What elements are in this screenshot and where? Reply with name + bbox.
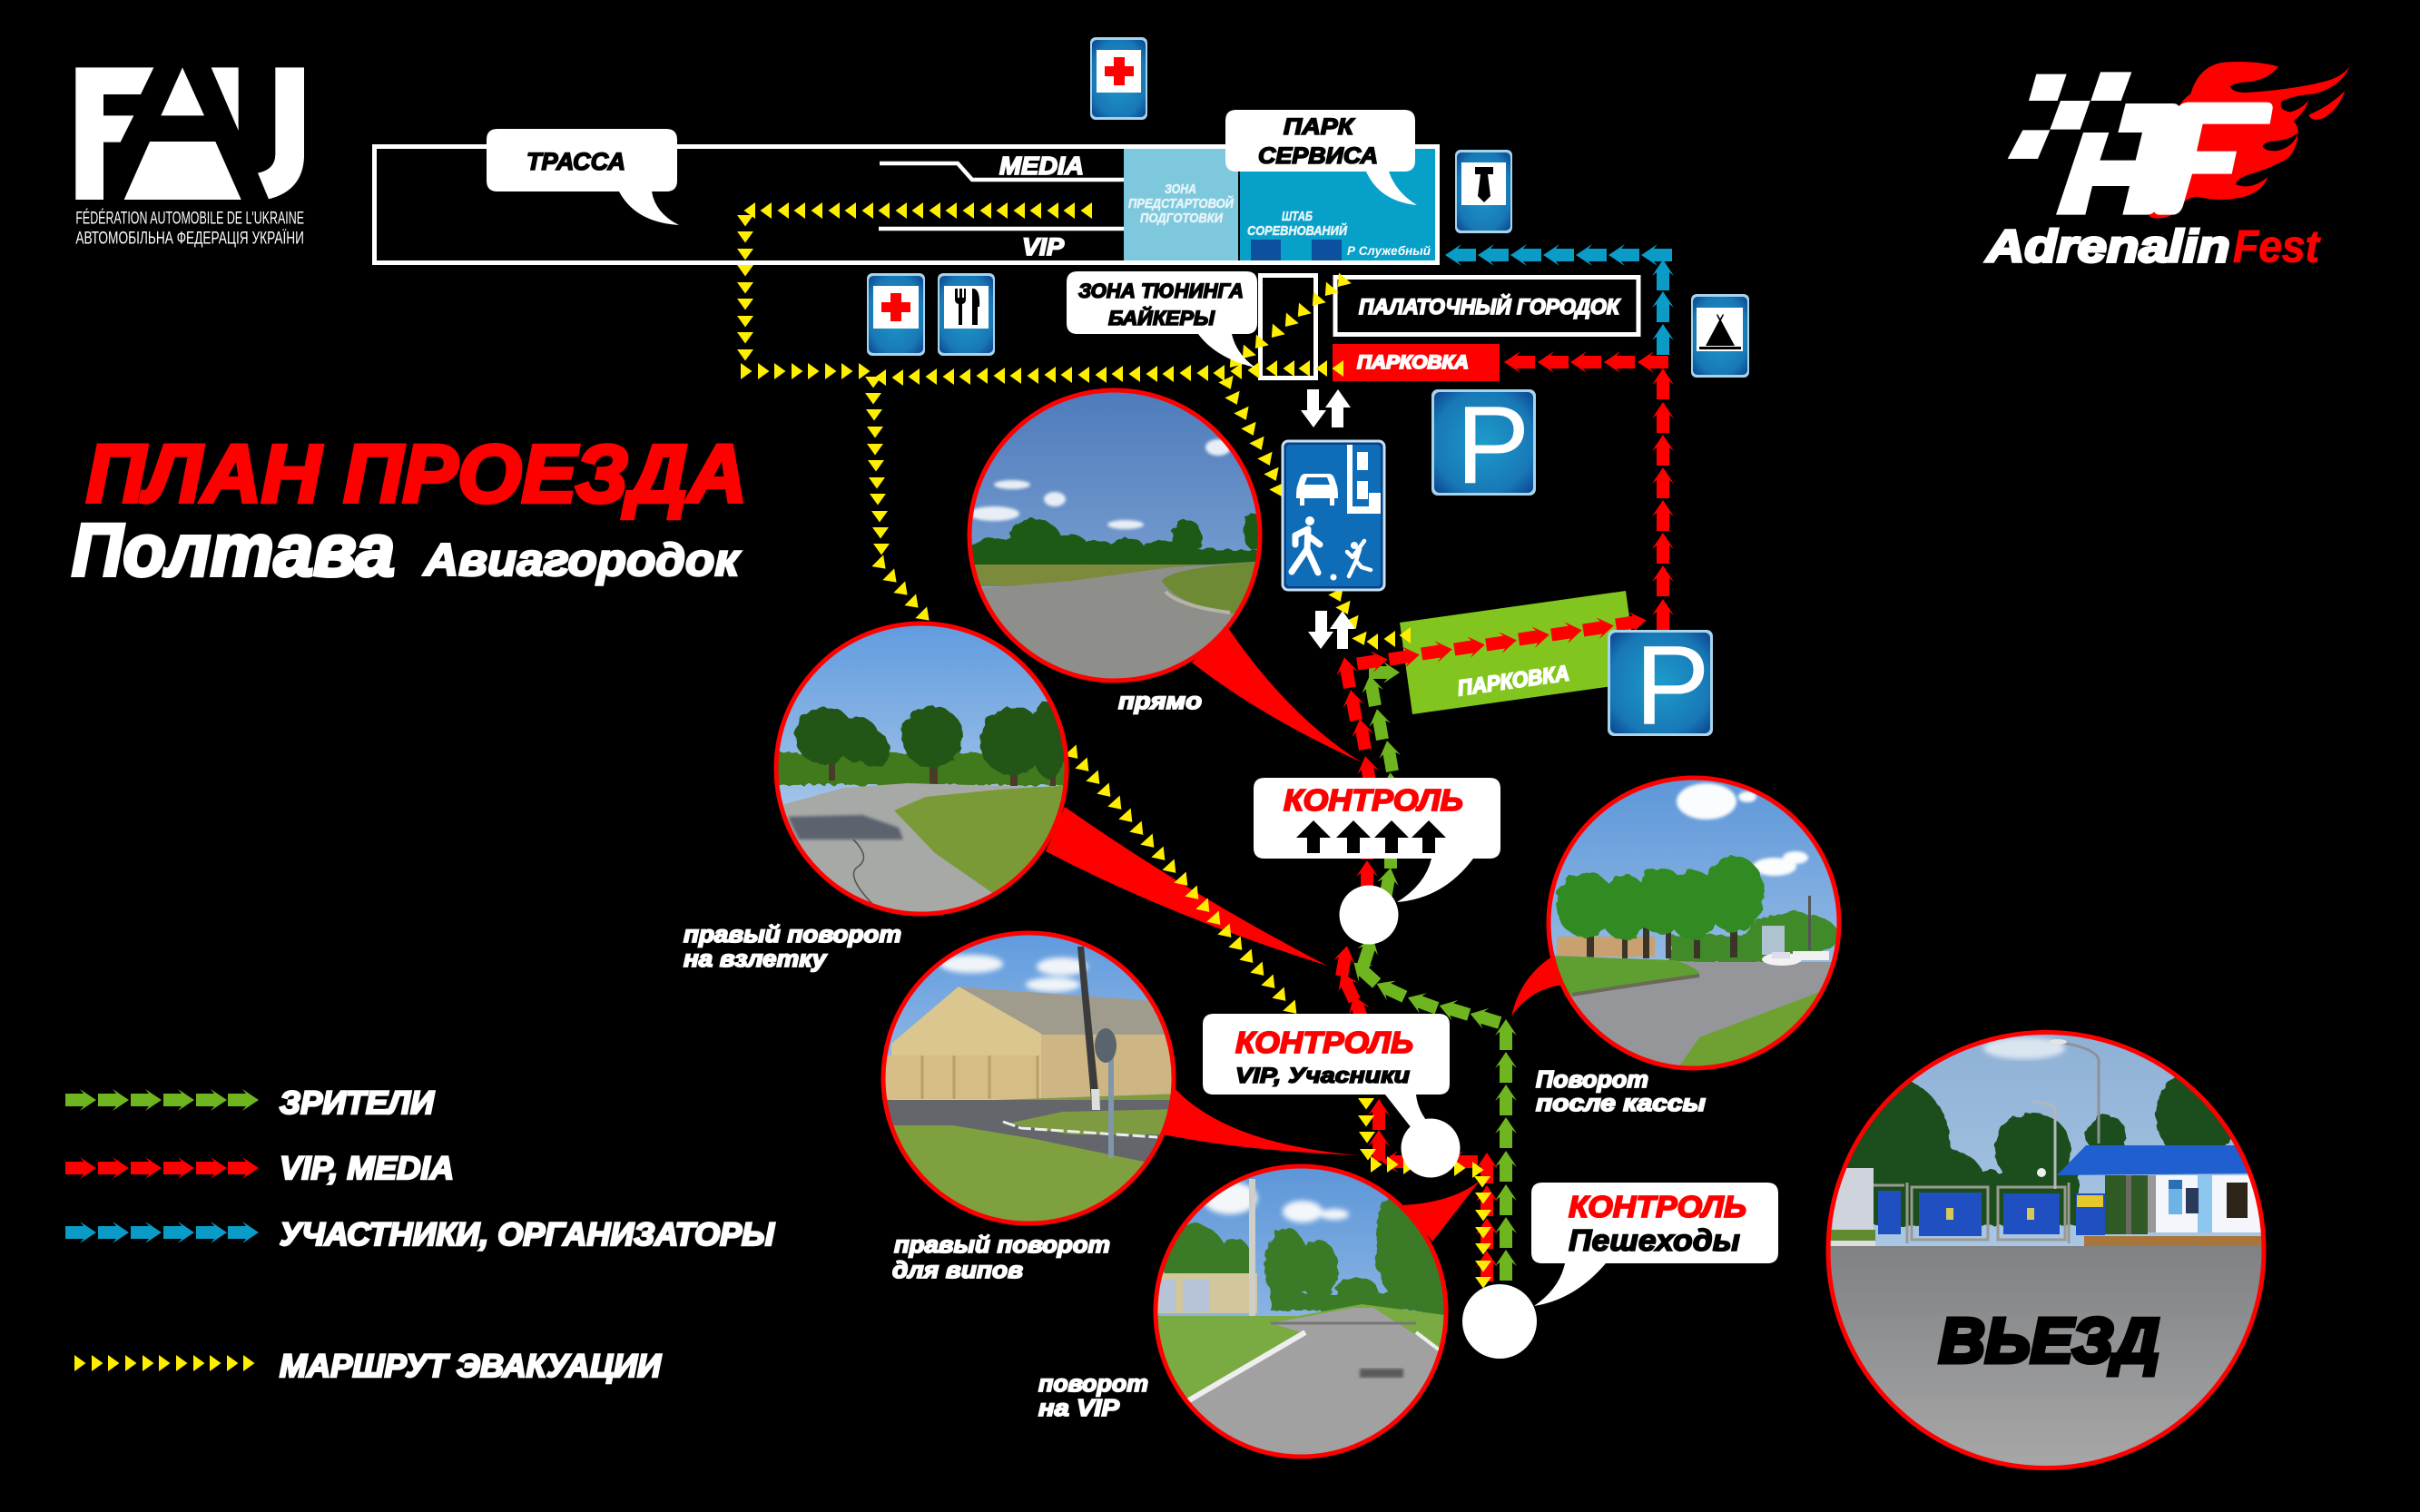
red parking label: [1333, 344, 1500, 381]
zone: pre-start preparation: [1124, 149, 1238, 260]
icon: parking sign upper: P: [1456, 383, 1530, 506]
caption: right turn for VIP: [892, 1231, 1110, 1283]
route: participants (blue arrows): [1445, 244, 1674, 355]
legend: spectators: [65, 1085, 435, 1121]
green parking area: [1400, 591, 1638, 714]
photo circle: straight ahead: [962, 386, 1271, 690]
media lane: MEDIA: [999, 152, 1084, 180]
pedestrian head: [1305, 516, 1314, 525]
zone: competition headquarters: ШТАБ: [1282, 209, 1313, 224]
legend: participants: [65, 1217, 775, 1252]
logo: FAU federation: FÉDÉRATION AUTOMOBILE DE L'UKRAINE: [75, 208, 304, 229]
track outline: [374, 147, 1438, 263]
title: [72, 429, 747, 592]
legend: [65, 1085, 775, 1384]
legend: evacuation route: [74, 1349, 662, 1384]
legend: evacuation route: МАРШРУТ ЭВАКУАЦИИ: [280, 1349, 662, 1384]
tent camp box: ПАЛАТОЧНЫЙ ГОРОДОК: [1359, 293, 1621, 319]
caption: right turn for VIP: для випов: [892, 1256, 1023, 1283]
bubble: tuning zone and bikers: ЗОНА ТЮНИНГА: [1078, 280, 1244, 302]
media lane: [880, 152, 1124, 180]
logo: AdrenalinFest: [1984, 62, 2349, 271]
route: spectators (green arrows): [1346, 662, 1517, 1281]
label: entry: ВЬЕЗД: [1939, 1305, 2159, 1376]
bubble: control pedestrians: Пешеходы: [1569, 1223, 1740, 1257]
bubble: service park: [1225, 110, 1417, 205]
title: Полтава: [72, 509, 395, 592]
photo circle: right turn to runway: [772, 617, 1071, 921]
red parking label: ПАРКОВКА: [1357, 352, 1469, 373]
bubble: control VIP participants: [1203, 1014, 1450, 1128]
legend: VIP and media: VIP, MEDIA: [280, 1151, 454, 1186]
zone: competition headquarters: Р Служебный: [1347, 243, 1431, 258]
logo: FAU federation: АВТОМОБІЛЬНА ФЕДЕРАЦІЯ УКРАЇНИ: [75, 228, 304, 248]
zone: pre-start preparation: ЗОНА: [1165, 182, 1196, 197]
zone: pre-start preparation: ПРЕДСТАРТОВОЙ: [1128, 195, 1235, 211]
VIP lane: VIP: [1022, 233, 1065, 260]
callout wedges: [1046, 628, 1563, 1242]
child: [1347, 541, 1371, 576]
icon: living zone road sign: [1282, 440, 1385, 591]
tuning zone frame: [1260, 276, 1316, 378]
bubble: service park: ПАРК: [1284, 114, 1355, 140]
zone: competition headquarters: СОРЕВНОВАНИЙ: [1247, 222, 1348, 239]
ball: [1331, 574, 1336, 581]
icon: tent camping sign: [1691, 294, 1749, 378]
caption: turn to VIP: поворот: [1038, 1370, 1148, 1397]
icon: food sign: [938, 273, 995, 356]
photo circle: entrance gate: [1825, 1029, 2269, 1473]
legend: VIP and media: [65, 1151, 454, 1186]
house windows: [1357, 452, 1368, 499]
title: Авиагородок: [422, 535, 742, 585]
icon: medical sign top: [1090, 37, 1147, 120]
icon: parking sign lower: P: [1635, 623, 1710, 749]
bubble: tuning zone and bikers: БАЙКЕРЫ: [1108, 306, 1215, 329]
bubble: control VIP participants: VIP, Учасники: [1235, 1064, 1410, 1088]
pedestrian: [1292, 529, 1320, 573]
photo circle: turn after ticket office: [1543, 771, 1852, 1080]
zone: competition headquarters: [1240, 149, 1435, 260]
bubble: control with arrows: КОНТРОЛЬ: [1284, 783, 1463, 817]
house: [1347, 445, 1381, 514]
child head: [1351, 542, 1358, 549]
green parking area: ПАРКОВКА: [1456, 661, 1571, 701]
control point markers: [1340, 886, 1537, 1359]
bubble: track: ТРАССА: [526, 148, 625, 175]
bubble: service park: СЕРВИСА: [1258, 143, 1378, 169]
caption: right turn to runway: [684, 920, 901, 972]
zone: pre-start preparation: ПОДГОТОВКИ: [1140, 211, 1224, 226]
bubble: control with arrows: [1254, 778, 1500, 902]
route: evacuation (yellow triangles): [737, 202, 1491, 1289]
logo: AdrenalinFest: Fest: [2233, 221, 2321, 271]
photo circle: right turn for VIP: [876, 930, 1180, 1234]
icon: medical sign lower: [867, 273, 925, 356]
title: ПЛАН ПРОЕЗДА: [86, 429, 747, 520]
route: VIP and media (red arrows): [1331, 351, 1674, 1281]
bubble: tuning zone and bikers: [1067, 271, 1257, 368]
two-way arrows lower: [1308, 611, 1355, 649]
caption: right turn to runway: правый поворот: [684, 920, 901, 947]
caption: turn to VIP: на VIP: [1038, 1394, 1120, 1421]
legend: spectators: ЗРИТЕЛИ: [280, 1085, 435, 1121]
caption: turn after ticket office: [1536, 1065, 1706, 1116]
caption: straight: прямо: [1118, 687, 1202, 714]
bubble: control VIP participants: КОНТРОЛЬ: [1235, 1026, 1413, 1059]
car: [1296, 474, 1338, 506]
icon: service tie sign: [1455, 150, 1512, 233]
logo: FAU federation: [75, 67, 304, 248]
caption: turn after ticket office: Поворот: [1536, 1065, 1648, 1093]
caption: turn to VIP: [1038, 1370, 1148, 1421]
bubble: track: [487, 129, 679, 225]
bubble: control pedestrians: КОНТРОЛЬ: [1569, 1190, 1746, 1223]
legend: participants: УЧАСТНИКИ, ОРГАНИЗАТОРЫ: [280, 1217, 775, 1252]
logo: AdrenalinFest: Adrenalin: [1984, 221, 2230, 271]
caption: right turn to runway: на взлетку: [684, 945, 828, 972]
photo circle: turn to VIP: [1153, 1162, 1456, 1470]
tent camp box: [1335, 278, 1638, 334]
caption: right turn for VIP: правый поворот: [894, 1231, 1110, 1258]
caption: turn after ticket office: после кассы: [1536, 1089, 1706, 1116]
two-way arrows upper: [1301, 389, 1351, 427]
bubble: control pedestrians: [1531, 1183, 1778, 1306]
